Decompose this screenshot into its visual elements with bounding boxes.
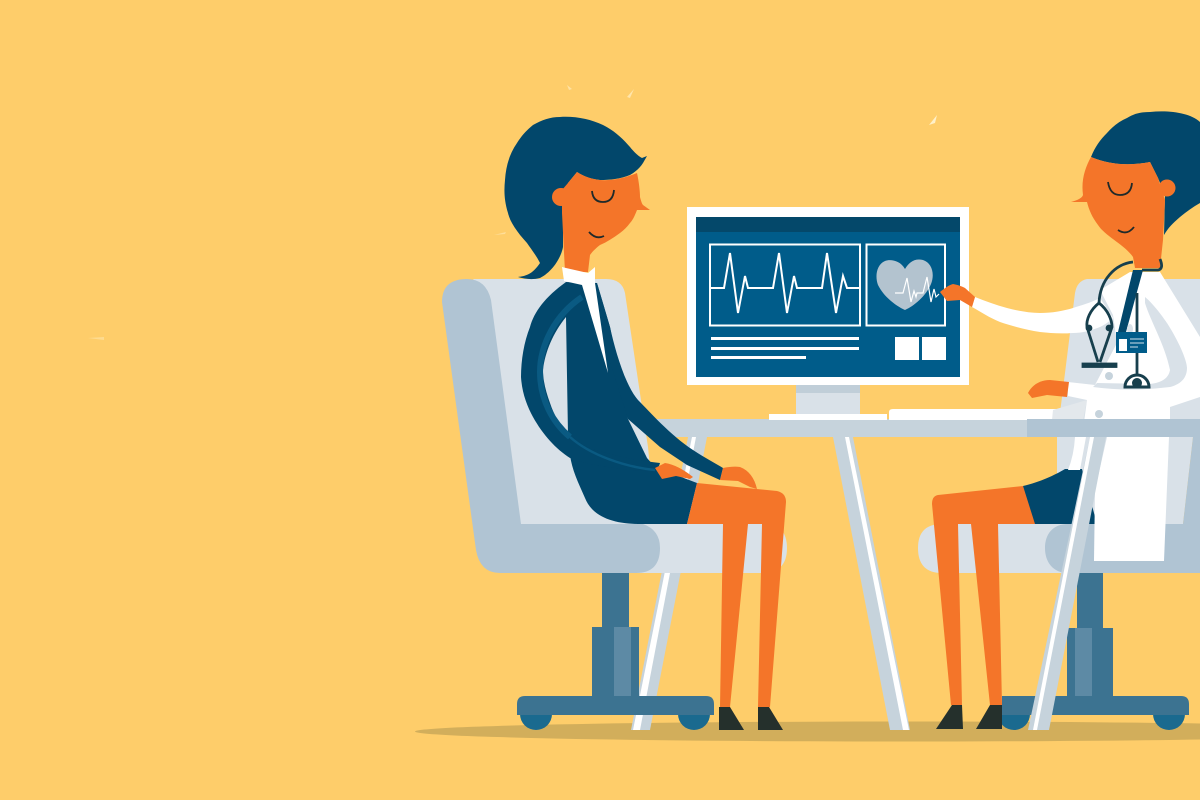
arm shading	[540, 297, 582, 437]
closed eye	[592, 190, 614, 202]
pointing hand	[940, 284, 975, 307]
near hand	[655, 463, 693, 479]
closed eye	[1108, 182, 1132, 195]
ear	[1158, 180, 1176, 196]
face and neck	[562, 172, 650, 272]
chair base and casters	[517, 570, 714, 730]
monitor stand	[796, 385, 860, 414]
desk front leg	[1028, 437, 1106, 730]
doctor	[932, 111, 1200, 729]
seat light	[918, 524, 1070, 573]
coat button lower	[1095, 410, 1103, 418]
patient chair	[442, 279, 787, 730]
floor shadow	[415, 722, 1200, 742]
lab coat body	[1068, 272, 1200, 430]
chair base and casters	[998, 570, 1189, 730]
coat shading band	[1093, 297, 1187, 390]
chair seat and back, light	[473, 279, 787, 573]
stethoscope chest piece	[1125, 375, 1149, 388]
desk centre leg	[833, 437, 910, 730]
keyboard	[889, 409, 1060, 420]
monitor title bar	[696, 217, 960, 232]
coat lapel lower left	[1052, 400, 1087, 420]
hair	[504, 117, 647, 279]
monitor frame	[687, 207, 969, 385]
hair	[1091, 111, 1200, 235]
coat button	[1105, 372, 1113, 380]
coat lower skirt	[1094, 437, 1169, 561]
collar and shirt	[562, 267, 608, 373]
far hand	[720, 467, 757, 489]
heart panel	[866, 244, 945, 326]
smile	[589, 232, 604, 237]
monitor	[687, 207, 969, 420]
shoes	[719, 707, 744, 730]
pointing arm	[972, 297, 1113, 333]
text lines	[711, 337, 859, 359]
legs	[687, 483, 786, 707]
id badge	[1116, 324, 1147, 353]
face and neck	[1071, 157, 1165, 268]
suit torso	[566, 282, 697, 524]
legs	[932, 486, 1036, 705]
suit far arm	[597, 283, 723, 480]
suit near arm	[521, 282, 660, 472]
chair back and seat, shaded	[442, 279, 660, 573]
smile	[1118, 227, 1134, 232]
coat strip under desk	[1068, 437, 1086, 470]
monitor screen	[696, 217, 960, 377]
ECG panel	[710, 244, 860, 326]
tie	[1118, 270, 1143, 332]
ear	[552, 188, 570, 206]
desk top left section	[650, 419, 1030, 437]
desk top right section	[1027, 419, 1200, 437]
lower hand	[1028, 380, 1069, 398]
seat and back shaded	[1045, 437, 1200, 573]
shoes	[936, 705, 963, 729]
stethoscope	[1083, 259, 1162, 375]
chair back light	[1057, 279, 1200, 524]
buttons	[895, 337, 946, 360]
arm shading lower	[570, 437, 655, 470]
sparkle marks	[88, 85, 937, 340]
patient	[504, 117, 786, 730]
desk far leg behind patient chair	[631, 437, 707, 730]
skirt	[1023, 469, 1097, 524]
doctor chair	[918, 279, 1200, 730]
